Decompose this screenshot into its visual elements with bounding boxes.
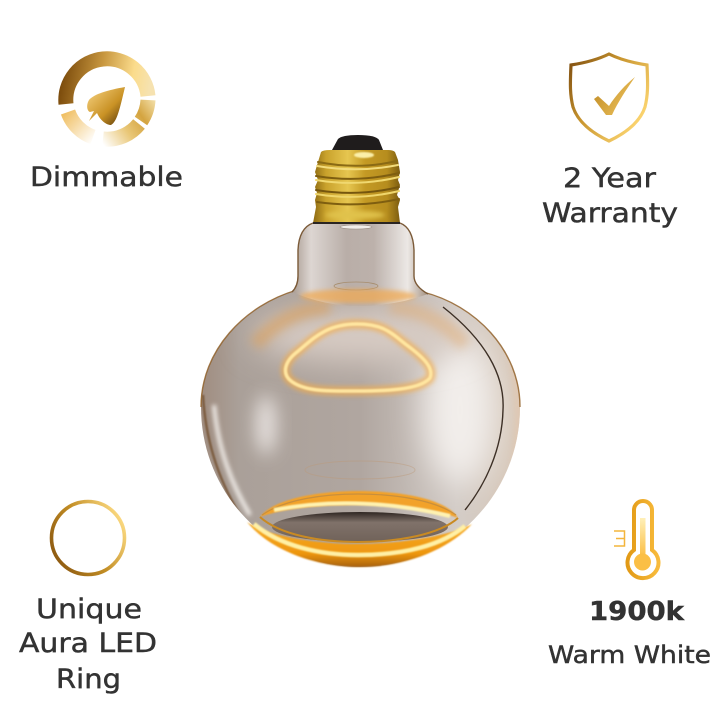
bulb: upper reflected LED loop [285,324,431,391]
label: 1900k: 1900k [589,597,685,627]
bulb: glass neck [292,222,428,306]
icon: warranty shield with check [570,54,648,141]
bulb: glowing LED aura ring [247,491,472,567]
bulb: black contact tip [332,135,383,150]
icon: thermometer [614,501,658,578]
label: unique aura led ring [19,594,157,695]
label: 2 year warranty: Warranty [542,198,678,229]
bulb: glass globe [201,290,530,567]
label: dimmable: Dimmable [30,162,183,193]
illustration: globe LED bulb [201,135,530,567]
bulb: brass screw cap [313,150,400,223]
label: unique aura led ring: Ring [56,664,121,695]
label: warm white: Warm White [548,641,711,669]
label: unique aura led ring: Unique [36,594,142,625]
label: 2 year warranty [542,163,678,229]
label: 2 year warranty: 2 Year [563,163,657,194]
icon: dimmable dial with flame [66,59,148,139]
icon: aura ring [52,502,124,574]
label: unique aura led ring: Aura LED [19,628,157,659]
